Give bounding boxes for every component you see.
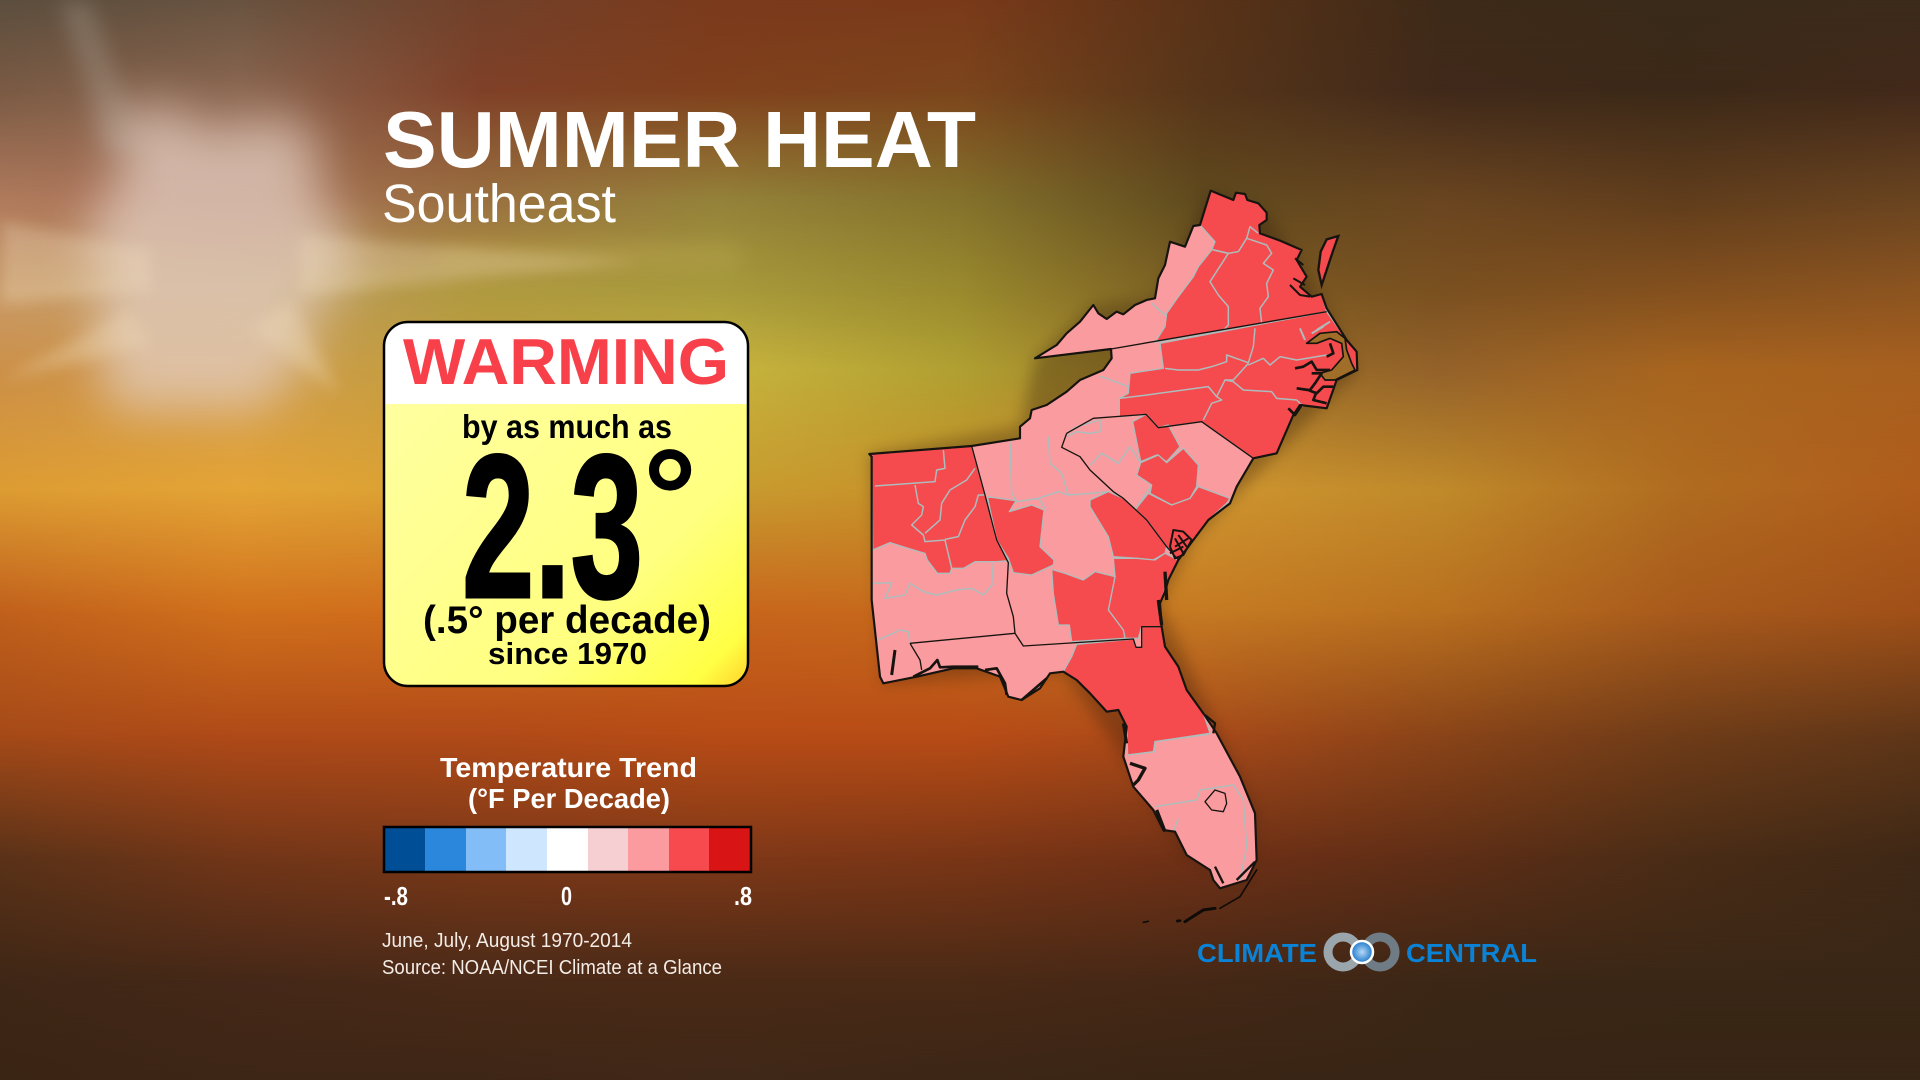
Georgia northeast <box>1090 492 1167 560</box>
map shadow <box>869 191 1357 880</box>
map: southeast climate divisions <box>869 191 1357 922</box>
logo wordmark left: CLIMATE <box>1197 940 1317 968</box>
legend title: (°F Per Decade) <box>468 783 670 814</box>
legend: temperature trend <box>384 752 752 911</box>
source note <box>382 929 722 979</box>
text: per decade: (.5° per decade) <box>423 599 711 642</box>
Georgia south central <box>1052 569 1125 642</box>
state outline <box>869 191 1357 888</box>
South Carolina coast <box>1135 487 1230 560</box>
South Carolina midlands <box>1137 448 1198 505</box>
Florida north <box>1063 627 1210 755</box>
logo wordmark right: CENTRAL <box>1406 940 1537 968</box>
division lines <box>872 227 1330 880</box>
warmer divisions <box>872 191 1357 755</box>
color scale <box>384 827 751 872</box>
degree sign: ° <box>643 421 697 572</box>
North Carolina east <box>1119 312 1357 458</box>
estuaries <box>892 258 1333 883</box>
text: by as much as: by as much as <box>462 408 672 445</box>
legend title: Temperature Trend <box>440 752 697 783</box>
text: since 1970: since 1970 <box>488 636 647 671</box>
scale labels: 0 <box>561 881 572 911</box>
Alabama north <box>872 446 1008 573</box>
logo rings <box>1328 937 1395 967</box>
sun flare <box>2 2 640 410</box>
legend title <box>440 752 697 814</box>
Georgia coast <box>1108 553 1178 638</box>
scale labels: -.8 <box>384 881 408 911</box>
South Carolina upper <box>1133 414 1180 462</box>
florida keys <box>1143 870 1257 922</box>
barrier island <box>1318 236 1338 285</box>
Georgia west <box>987 497 1054 575</box>
source note: Source: NOAA/NCEI Climate at a Glance <box>382 956 722 979</box>
subtitle: Southeast <box>382 174 616 234</box>
state base fill <box>869 191 1357 888</box>
heading: warming: WARMING <box>403 325 729 398</box>
big number: 2.3 <box>462 413 643 641</box>
state borders <box>910 312 1327 812</box>
scale labels <box>384 881 752 911</box>
logo: climate central <box>1197 937 1537 968</box>
title: SUMMER HEAT <box>383 95 976 184</box>
horizon streak <box>440 245 740 267</box>
Virginia east <box>1155 191 1327 342</box>
coastal sounds <box>1307 332 1355 380</box>
source note: June, July, August 1970-2014 <box>382 929 632 952</box>
scale labels: .8 <box>734 881 752 911</box>
callout card: warming <box>384 322 748 686</box>
